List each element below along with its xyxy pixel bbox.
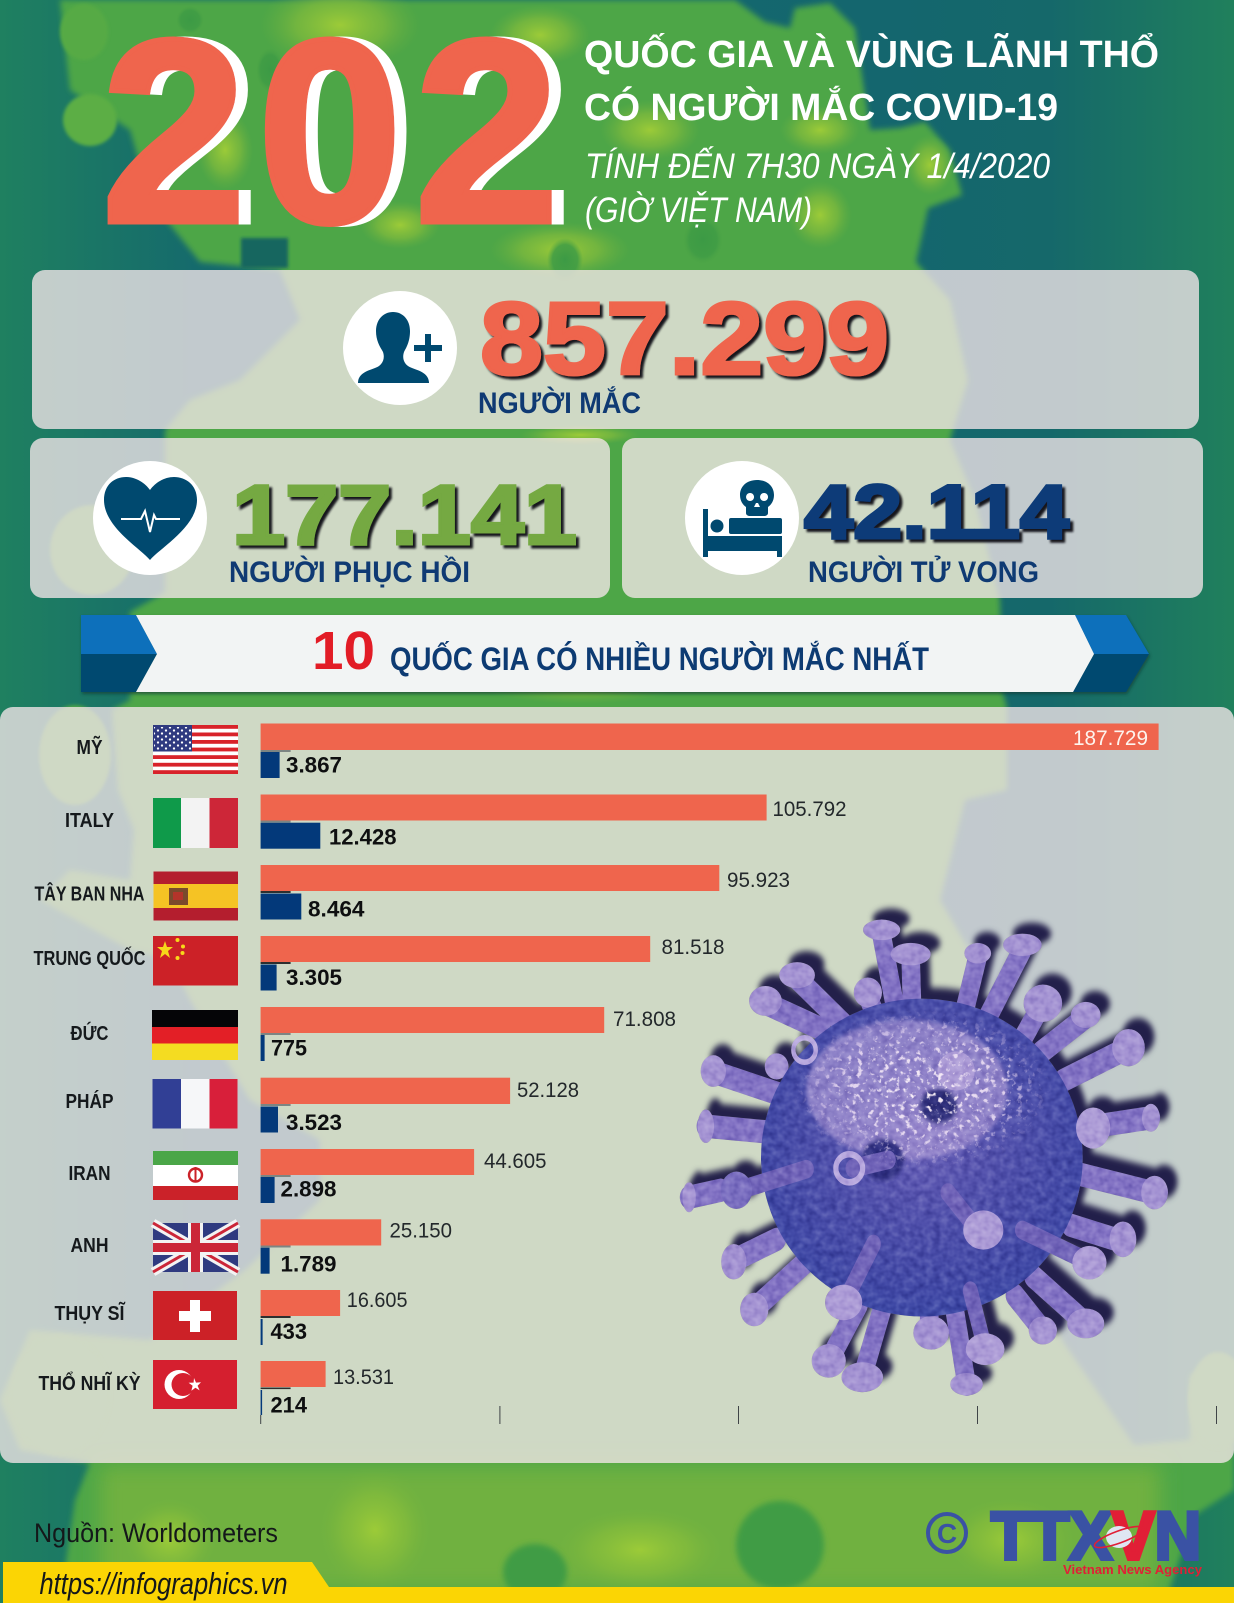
source note: Nguồn: Worldometers [34,1518,278,1548]
row: Thổ Nhĩ Kỳ: 214 [270,1393,308,1418]
row: Iran [68,1149,546,1203]
row: Anh: 1.789 [280,1252,336,1277]
row: Tây Ban Nha: TÂY BAN NHA [34,882,144,906]
banner text: QUỐC GIA CÓ NHIỀU NGƯỜI MẮC NHẤT [390,641,929,677]
row: Tây Ban Nha [34,865,790,922]
row: Mỹ: 187.729 [1073,727,1148,750]
row: Đức: ĐỨC [70,1021,108,1045]
total cases number: 857.299 [480,281,889,396]
row: Anh: 25.150 [390,1220,452,1243]
row: Thổ Nhĩ Kỳ: THỔ NHĨ KỲ [38,1371,141,1395]
illustration: purple coronavirus [682,920,1168,1395]
row: Italy [65,794,846,850]
panel: deaths [622,438,1203,598]
recovered label: NGƯỜI PHỤC HỒI [229,555,470,589]
panel: top 10 chart [0,707,1234,1463]
row: Pháp: 3.523 [286,1110,342,1135]
banner number 10: 10 [312,621,375,681]
icon: bed with skull [685,461,799,575]
row: Thụy Sĩ [54,1289,408,1345]
total cases label: NGƯỜI MẮC [478,386,641,420]
row: Mỹ: 3.867 [286,753,342,778]
panel: total cases [32,270,1199,429]
row: Đức: 71.808 [613,1008,676,1031]
row: Thụy Sĩ: 433 [270,1319,307,1344]
subtitle date [585,146,1050,230]
row: Tây Ban Nha: 95.923 [727,869,790,892]
logo: TTXVN: TTXVN [991,1498,1201,1574]
panel: recovered [30,438,610,598]
virus body [761,999,1083,1316]
footer yellow band [3,1562,1234,1603]
row: Mỹ: MỸ [76,736,103,759]
logo: TTXVN: C [937,1518,957,1549]
row: Pháp [66,1078,579,1135]
row: Trung Quốc: TRUNG QUỐC [34,946,146,970]
row: Italy: 12.428 [329,825,396,850]
row: Pháp: 52.128 [517,1079,579,1102]
subtitle date: (GIỜ VIỆT NAM) [585,191,812,230]
row: Anh [70,1219,452,1277]
icon: heart with pulse [93,461,207,575]
row: Trung Quốc: 81.518 [662,936,724,959]
row: Italy: ITALY [65,810,115,832]
row: Thụy Sĩ: 16.605 [347,1289,408,1312]
row: Tây Ban Nha: 8.464 [308,897,365,922]
footer url: https://infographics.vn [40,1566,288,1601]
row: Đức: 775 [271,1036,307,1061]
logo: TTXVN: Vietnam News Agency [1063,1562,1203,1577]
row: Trung Quốc [34,936,724,990]
row: Đức [70,1007,676,1061]
banner: top 10 heading [81,615,1149,692]
axis ticks [260,1406,1217,1424]
row: Thổ Nhĩ Kỳ: 13.531 [333,1366,394,1389]
row: Italy: 105.792 [772,798,846,821]
title heading: CÓ NGƯỜI MẮC COVID-19 [584,85,1058,129]
title heading [584,31,1159,129]
row: Trung Quốc: 3.305 [286,965,342,990]
row: Iran: IRAN [68,1163,110,1185]
deaths label: NGƯỜI TỬ VONG [808,555,1039,589]
row: Thụy Sĩ: THỤY SĨ [54,1302,126,1325]
recovered number: 177.141 [232,468,577,562]
row: Anh: ANH [70,1235,108,1257]
row: Mỹ [76,724,1159,778]
icon: person with plus [343,291,457,405]
subtitle date: TÍNH ĐẾN 7H30 NGÀY 1/4/2020 [585,146,1050,186]
row: Iran: 2.898 [280,1177,336,1202]
row: Iran: 44.605 [484,1150,546,1173]
title heading: QUỐC GIA VÀ VÙNG LÃNH THỔ [584,31,1159,76]
row: Pháp: PHÁP [66,1090,114,1113]
deaths number: 42.114 [804,470,1069,555]
row: Thổ Nhĩ Kỳ [38,1360,394,1418]
